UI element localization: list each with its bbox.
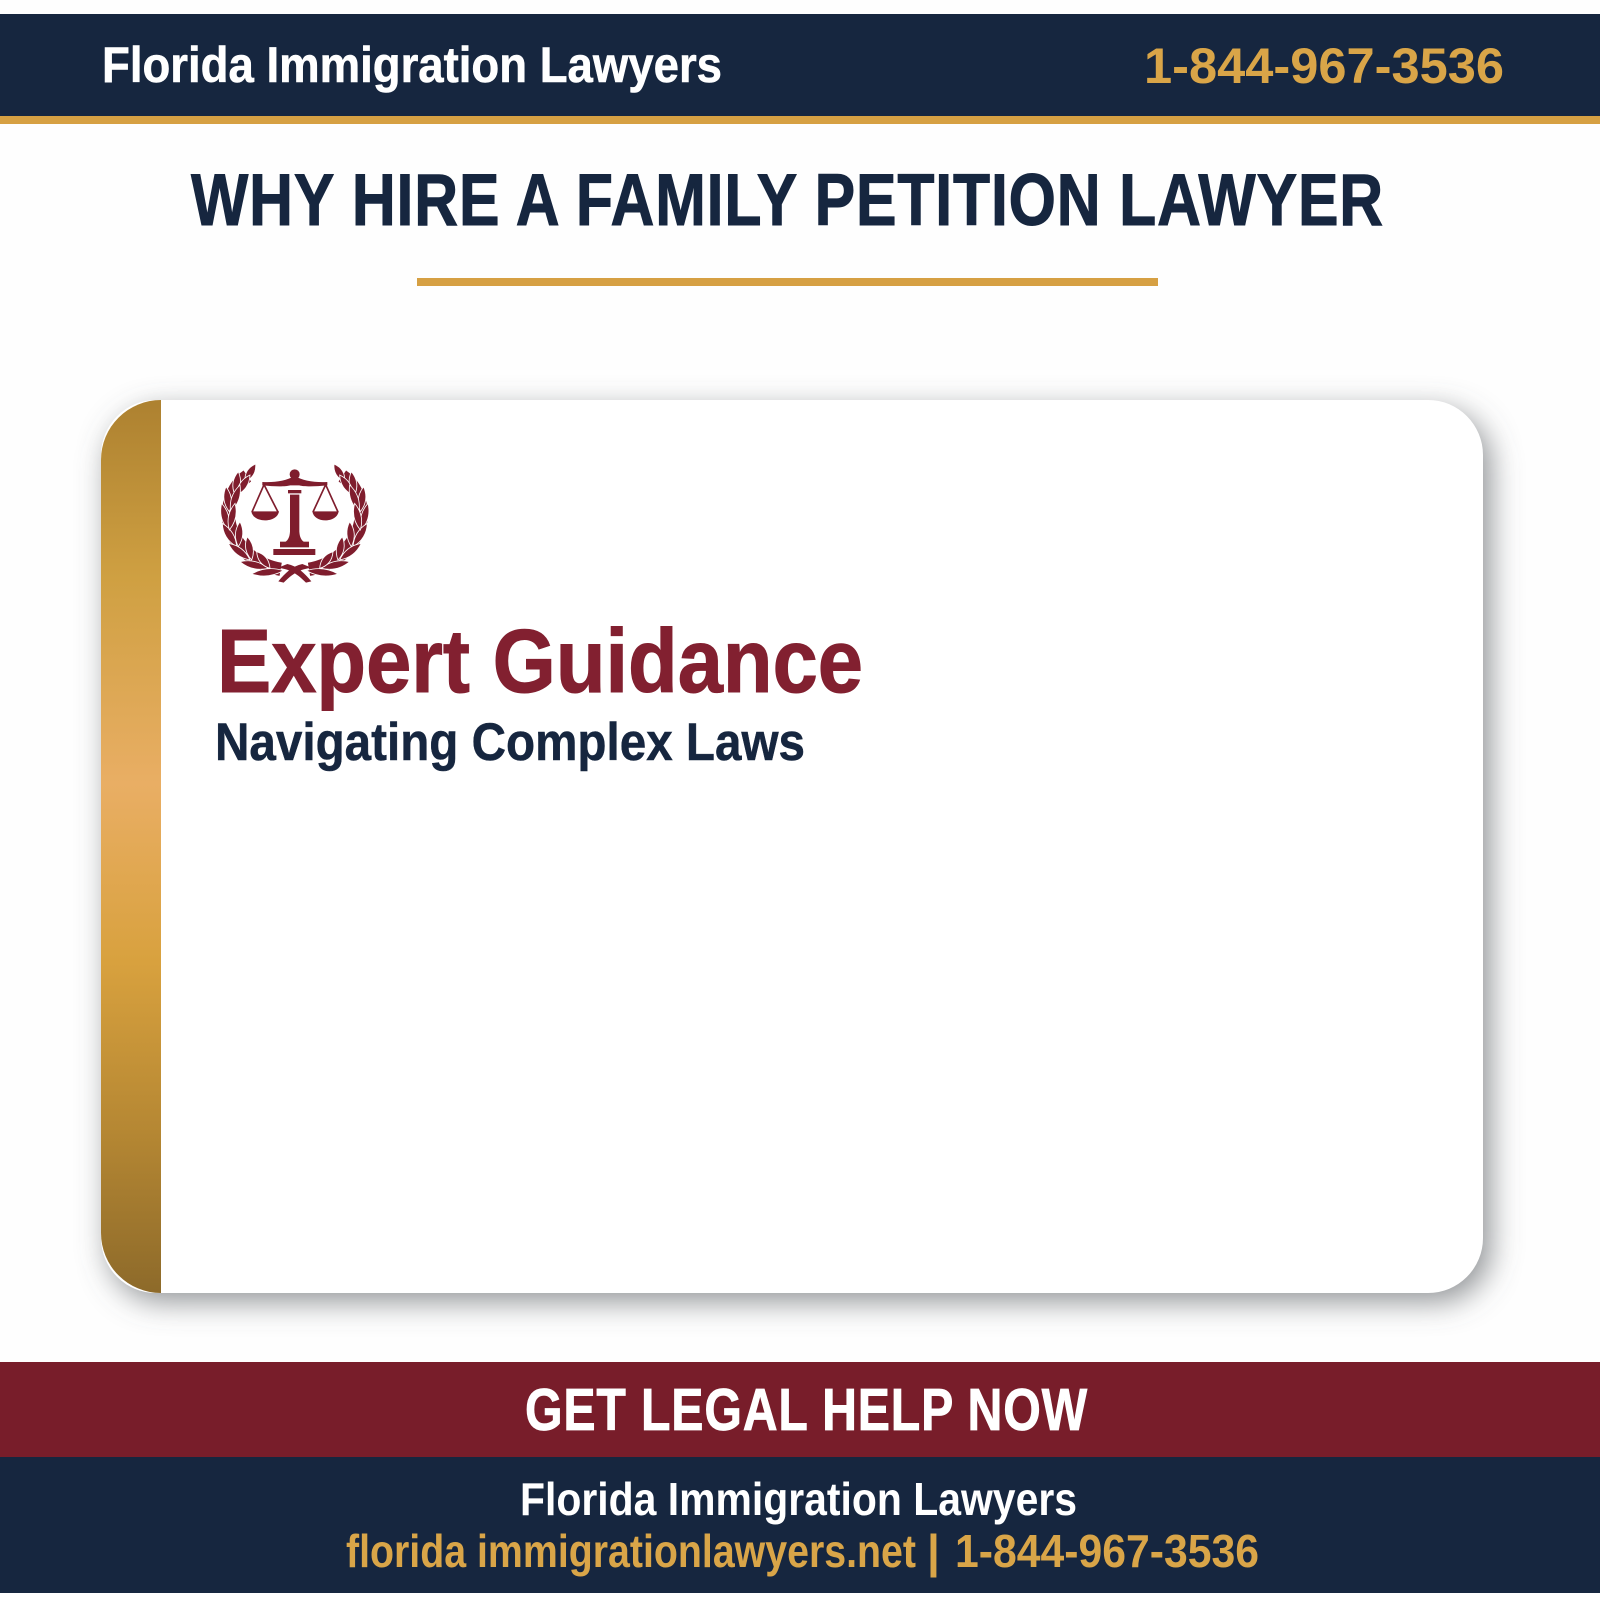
header bar xyxy=(0,14,1600,124)
footer firm name: Florida Immigration Lawyers xyxy=(520,1473,1077,1525)
card gold accent bar xyxy=(101,400,161,1293)
card subheading: Navigating Complex Laws xyxy=(215,713,805,772)
main title: WHY HIRE A FAMILY PETITION LAWYER xyxy=(191,160,1384,241)
card heading: Expert Guidance xyxy=(217,612,863,712)
panel: expert guidance card xyxy=(101,400,1491,1302)
footer website and phone: 1-844-967-3536 xyxy=(955,1525,1259,1577)
header phone number: 1-844-967-3536 xyxy=(1144,38,1504,94)
icon: scales of justice in laurel wreath xyxy=(221,464,369,583)
call to action text: GET LEGAL HELP NOW xyxy=(525,1377,1088,1443)
footer contact bar xyxy=(0,1457,1600,1593)
header firm name: Florida Immigration Lawyers xyxy=(102,37,722,93)
call to action band xyxy=(0,1362,1600,1457)
title underline xyxy=(417,278,1158,286)
footer website and phone: | xyxy=(927,1525,940,1577)
footer website and phone: florida immigrationlawyers.net xyxy=(346,1525,916,1577)
